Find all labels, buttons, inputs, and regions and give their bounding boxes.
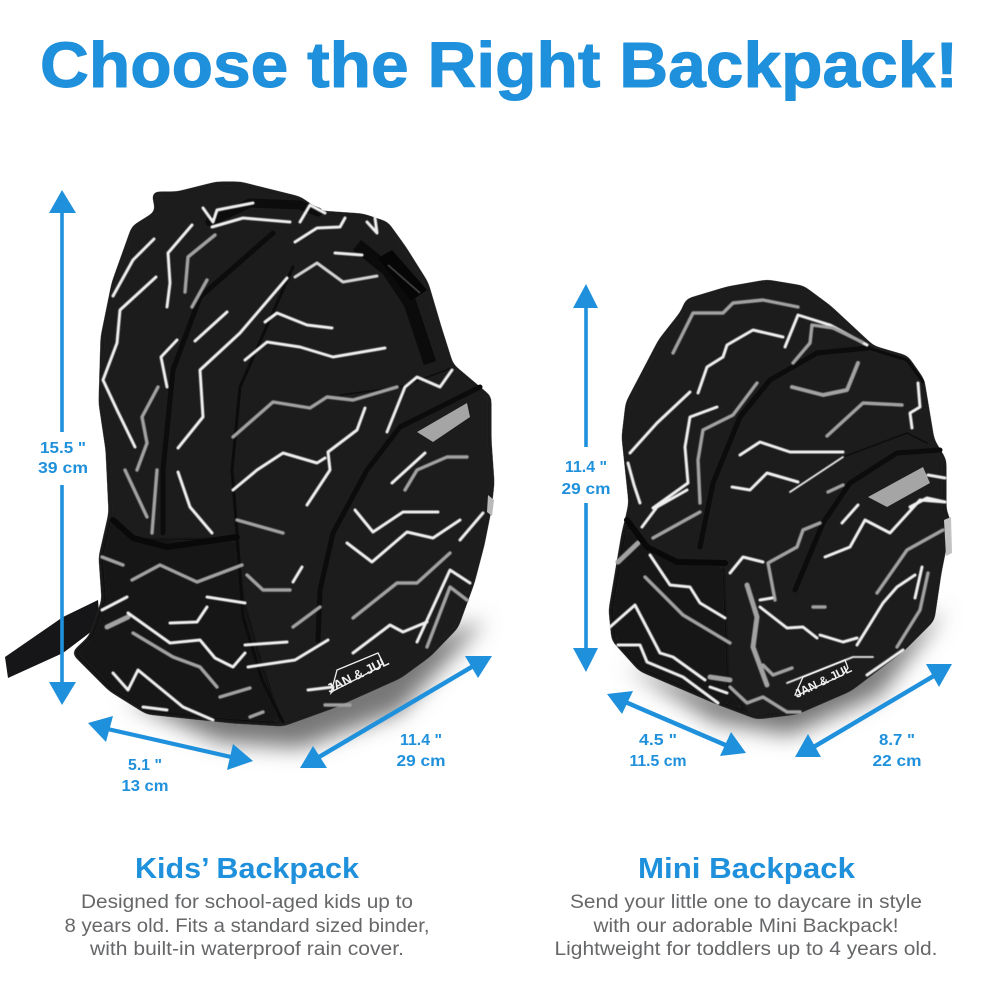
text: mini description: with our adorable Mini Backpack! (592, 916, 898, 937)
label: mini depth: 4.5 " (639, 732, 677, 749)
text: mini description: Lightweight for toddlers up to 4 years old. (554, 939, 938, 960)
kids backpack photo (5, 183, 494, 748)
heading: mini backpack: Mini Backpack (638, 853, 856, 885)
label: kids depth: 5.1 " (128, 757, 162, 774)
label: kids depth: 13 cm (122, 778, 168, 795)
arrow: mini height (573, 284, 598, 672)
title: Choose the Right Backpack! (40, 29, 958, 101)
label: kids depth (122, 757, 168, 795)
label: mini height: 29 cm (562, 481, 610, 498)
mini backpack photo (610, 281, 952, 735)
text: mini description (554, 892, 938, 960)
label: mini height: 11.4 " (565, 459, 607, 476)
heading: kids backpack: Kids’ Backpack (135, 853, 360, 885)
text: mini description: Send your little one to daycare in style (570, 892, 922, 913)
label: mini depth (630, 732, 686, 770)
label: kids height: 39 cm (38, 460, 88, 477)
text: kids description: with built-in waterproof rain cover. (89, 939, 404, 960)
label: mini width (872, 732, 922, 770)
kids backpack photo: JAN & JUL (324, 653, 391, 696)
arrow: mini depth (607, 691, 746, 756)
mini backpack photo: JAN & JUL (792, 661, 854, 701)
label: mini depth: 11.5 cm (630, 753, 686, 770)
label: kids height (38, 440, 88, 477)
text: kids description: Designed for school-aged kids up to (81, 892, 413, 913)
label: mini height (562, 459, 610, 498)
text: kids description (64, 892, 430, 960)
arrow: kids width (300, 656, 492, 768)
arrow: kids depth (88, 716, 253, 770)
label: kids width (396, 732, 446, 770)
label: kids width: 29 cm (396, 753, 446, 770)
arrow: mini width (795, 664, 952, 757)
label: kids width: 11.4 " (400, 732, 442, 749)
label: mini width: 8.7 " (879, 732, 915, 749)
label: kids height: 15.5 " (40, 440, 86, 457)
label: mini width: 22 cm (872, 753, 922, 770)
arrow: kids height (49, 190, 76, 705)
text: kids description: 8 years old. Fits a standard sized binder, (64, 916, 430, 937)
